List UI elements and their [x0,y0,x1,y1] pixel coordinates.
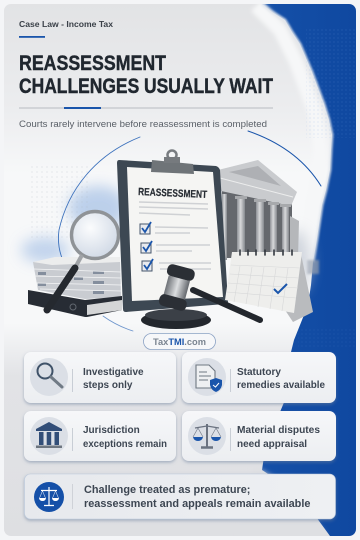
text: investigative steps only: Investigative [83,367,144,378]
document text lines [139,202,211,269]
card: jurisdiction exceptions [24,411,176,461]
logo pill [144,334,216,350]
watercolor wash behind illustration [21,165,310,294]
text: material disputes need appraisal: Material disputes [237,425,320,436]
icon: search [38,364,62,387]
icon: scales in blue circle [34,482,64,512]
title: REASSESSMENT [19,51,166,75]
text: jurisdiction exceptions remain: exceptions remain [83,439,167,450]
icon: magnifying glass [47,212,118,310]
icon: court building [218,160,299,260]
text: material disputes need appraisal: need appraisal [237,439,307,450]
icon: institution [36,422,62,448]
icon: stacked documents and binders [28,257,122,317]
subtitle: Courts rarely intervene before reassessment is completed [19,119,267,130]
card: statutory remedies [182,352,336,403]
text: jurisdiction exceptions remain: Jurisdiction [83,425,140,436]
title: CHALLENGES USUALLY WAIT [19,74,273,98]
text: conclusion: Challenge treated as premature; [84,484,250,496]
icon: scales [193,424,221,448]
decorative arc [58,131,321,331]
checklist [140,222,153,271]
icon: desk calendar [225,250,313,322]
text: conclusion: reassessment and appeals remain available [84,498,310,510]
kicker label: Case Law - Income Tax [19,19,113,29]
text: statutory remedies available: remedies available [237,380,325,391]
card: material disputes [182,411,336,461]
logo pill: TaxTMI.com [153,337,206,348]
kicker accent bar [19,36,45,38]
icon: clipboard clip [151,150,194,174]
icon: document with shield [196,365,222,392]
card: investigative steps [24,352,176,403]
blue torn paper area [252,4,356,536]
clipboard heading: REASSESSMENT [138,186,208,201]
title divider [19,107,273,109]
clipboard [117,150,228,312]
text: investigative steps only: steps only [83,380,133,391]
text: statutory remedies available: Statutory [237,367,281,378]
icon: gavel [141,263,260,329]
conclusion banner [24,474,336,519]
